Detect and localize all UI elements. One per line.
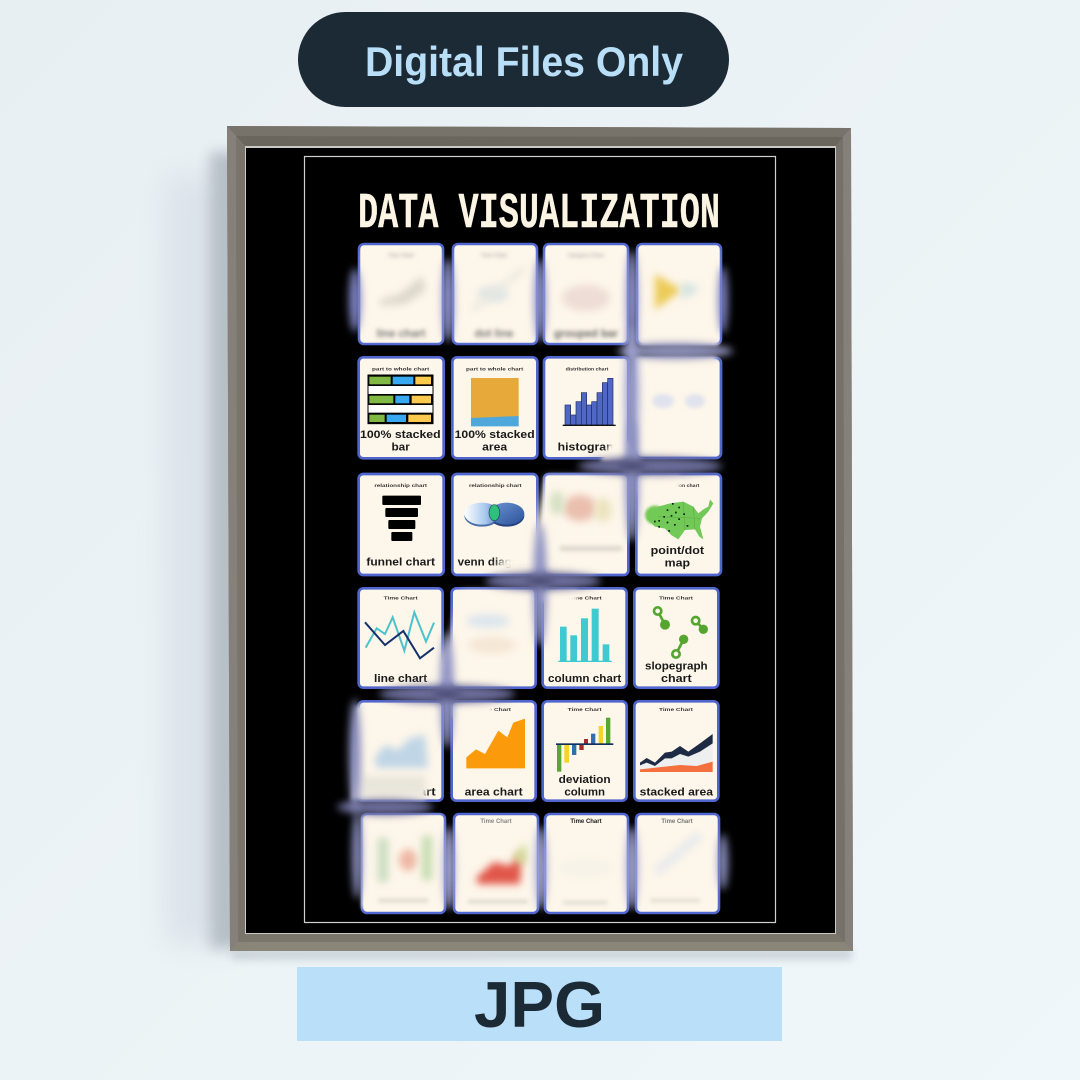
JPG format banner	[297, 967, 782, 1041]
histogram label cover	[600, 440, 640, 462]
blurred censor halos	[337, 250, 733, 910]
card: stacked area: Time Chart	[659, 707, 693, 713]
card: histogram	[544, 357, 628, 458]
card row 2 and 3 sharp charts	[359, 357, 721, 575]
card: 100% stacked area: part to whole chart	[466, 366, 524, 372]
card: grouped bar (blurred): grouped bar	[554, 328, 619, 340]
card: row 5 column 1 outline: basic chart	[366, 786, 436, 798]
card: point/dot map	[636, 474, 721, 575]
card: blurred column 4	[636, 814, 719, 913]
card: deviation column: column	[564, 786, 605, 798]
card: slopegraph chart: chart	[661, 673, 692, 685]
card: line chart: line chart	[374, 673, 428, 685]
card: venn diagram: relationship chart	[469, 483, 522, 489]
card: line chart	[359, 588, 443, 688]
card: slopegraph chart: Time Chart	[659, 595, 693, 601]
card: row 5 column 1 blurred	[352, 706, 438, 800]
card: dot line (blurred): dot line	[474, 328, 514, 340]
card: point/dot map: point/dot	[651, 545, 704, 557]
card: 100% stacked bar	[359, 357, 444, 458]
area chart title cover	[453, 704, 493, 717]
card: row 4 column 2 outline	[452, 588, 536, 688]
card: grouped bar (blurred): Category Chart	[568, 253, 604, 259]
card: dot line (blurred): Time Chart	[481, 253, 507, 259]
card: funnel chart	[359, 474, 444, 575]
card: column chart	[543, 588, 627, 688]
row 1 blurred cards	[359, 244, 721, 346]
card: histogram: histogram	[558, 442, 617, 454]
card: 100% stacked area	[452, 357, 537, 458]
card: row 2 column 4 blurred	[634, 356, 721, 458]
card: blurred funnel	[637, 244, 721, 346]
card: 100% stacked area: 100% stacked	[455, 429, 535, 441]
card: slopegraph chart: slopegraph	[645, 661, 708, 673]
card: blurred column 2	[454, 814, 538, 913]
card: stacked area	[634, 701, 718, 801]
card: point/dot map: map	[665, 558, 690, 570]
card: slopegraph chart	[634, 588, 718, 688]
pill badge: Digital Files Only	[298, 12, 729, 107]
card: row 5 column 1 outline	[359, 701, 443, 801]
card: point/dot map: distribution chart	[657, 483, 700, 489]
card: dot line (blurred)	[453, 244, 537, 344]
map title cover	[638, 476, 680, 494]
poster black panel	[246, 148, 835, 933]
card: 100% stacked bar: 100% stacked	[360, 429, 441, 441]
card: 100% stacked area: area	[482, 442, 508, 454]
card: 100% stacked bar: bar	[391, 442, 411, 454]
card: line chart: Time Chart	[384, 595, 418, 601]
row 6 blurred cards	[362, 814, 719, 913]
card: blurred column 1	[362, 814, 445, 913]
card: deviation column	[543, 701, 627, 801]
JPG format banner: JPG	[474, 968, 605, 1041]
card: area chart: Time Chart	[477, 707, 511, 713]
card: row 4 column 2 blurred	[430, 592, 532, 686]
card: area chart: area chart	[465, 786, 523, 798]
card: venn diagram: venn diagram	[458, 557, 533, 569]
card: funnel chart: funnel chart	[366, 557, 435, 569]
card: blurred column 4: Time Chart	[661, 819, 693, 825]
picture frame	[227, 126, 853, 951]
card: area chart	[452, 701, 536, 801]
card: stacked area: stacked area	[640, 786, 714, 798]
pill badge: Digital Files Only: Digital Files Only	[365, 38, 684, 85]
card: heat map outline	[544, 474, 628, 575]
card: line chart (blurred): line chart	[377, 328, 426, 340]
card: line chart (blurred): Time Chart	[388, 253, 414, 259]
card: row 3 column 3 blurred heat map	[497, 477, 624, 572]
frame shadow	[165, 152, 852, 960]
card: grouped bar (blurred)	[544, 244, 628, 344]
card: blurred column 3	[545, 814, 628, 913]
card: column chart: column chart	[548, 673, 622, 685]
card row 4 and 5 sharp charts	[359, 588, 718, 801]
card: column chart: Time Chart	[568, 595, 602, 601]
card: deviation column: deviation	[559, 774, 611, 786]
card: line chart (blurred)	[359, 244, 443, 344]
poster inner white border	[304, 156, 776, 922]
card: blurred column 2: Time Chart	[480, 819, 512, 825]
card: 100% stacked bar: part to whole chart	[372, 366, 430, 372]
card: blurred column 3: Time Chart	[570, 819, 602, 825]
card: funnel chart: relationship chart	[374, 483, 427, 489]
card: deviation column: Time Chart	[568, 707, 602, 713]
card: histogram: distribution chart	[566, 366, 609, 372]
poster title: DATA VISUALIZATION	[358, 186, 720, 243]
column chart title cover	[541, 590, 577, 602]
card: venn diagram	[452, 474, 537, 575]
